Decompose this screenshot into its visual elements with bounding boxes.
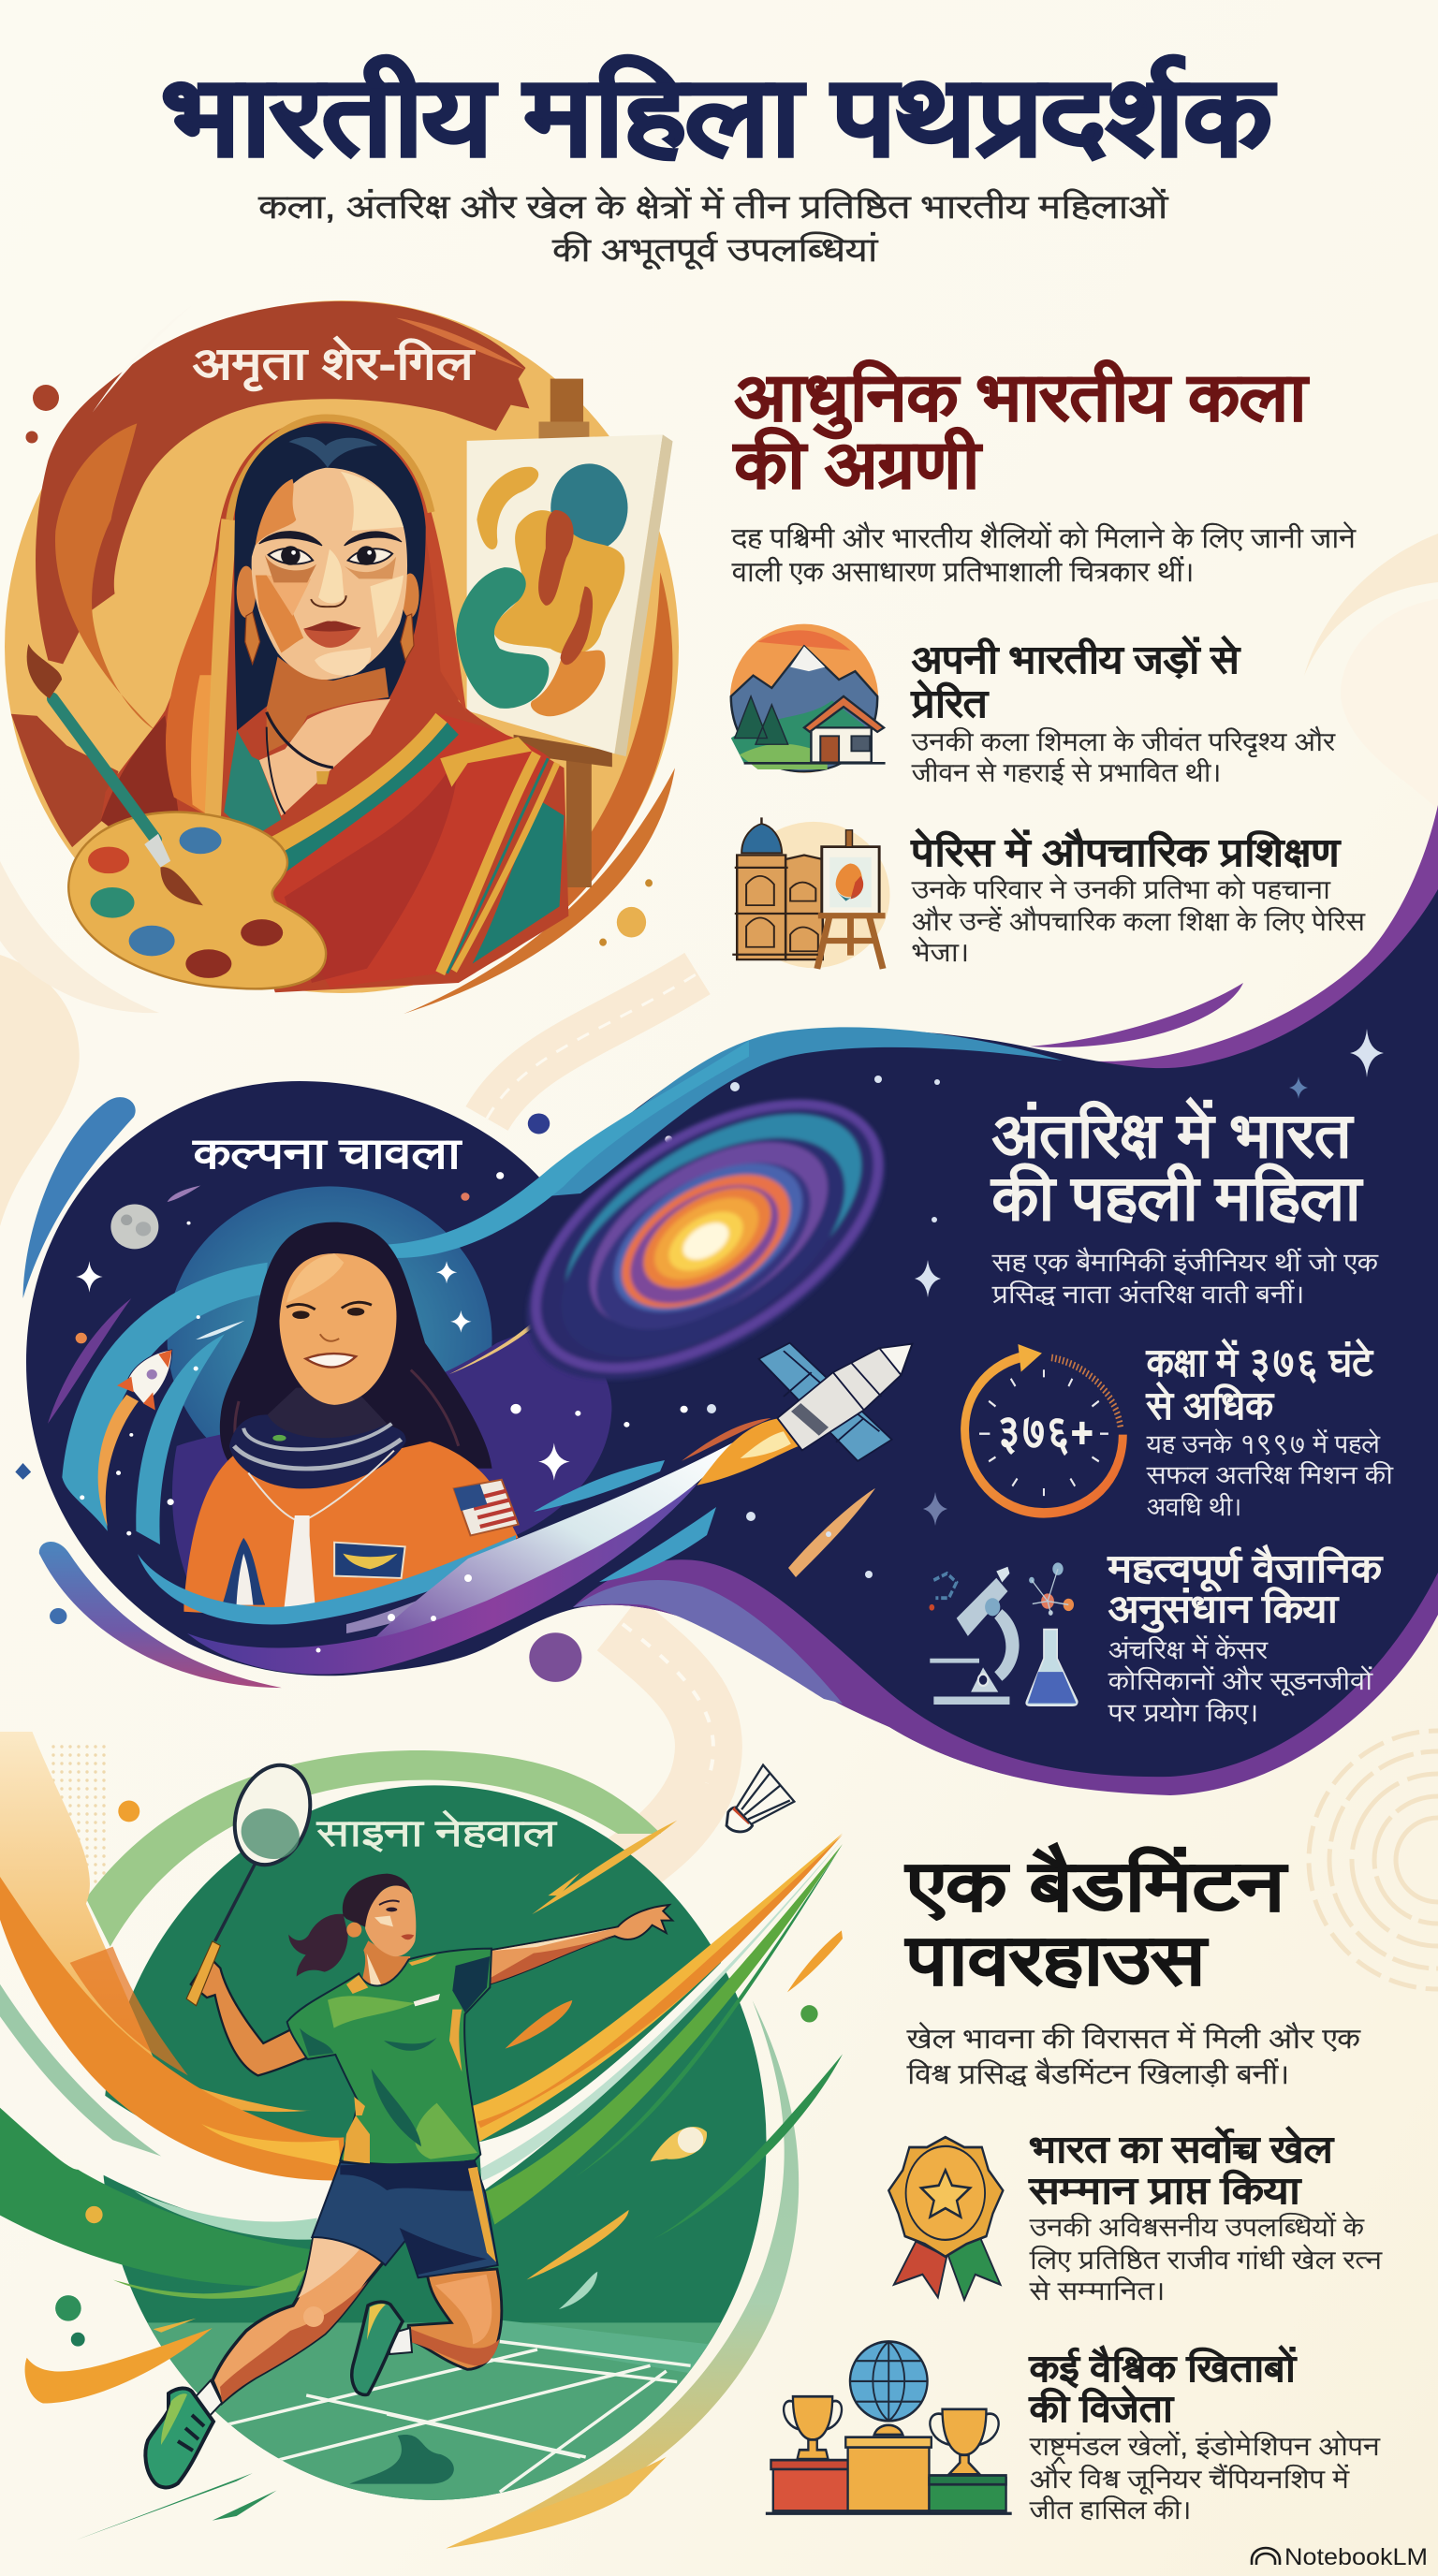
front sock and shoe xyxy=(145,2380,222,2487)
jersey xyxy=(287,1949,492,2165)
sub heading: research: अनुसंधान किया xyxy=(1108,1587,1340,1633)
small rocket xyxy=(98,1350,172,1527)
body: hours: सफल अतरिक्ष मिशन की xyxy=(1146,1460,1394,1489)
icon: medal xyxy=(888,2137,1003,2300)
stars and sparkles xyxy=(76,1082,739,1535)
saree base xyxy=(101,417,568,992)
scene: Kalpana Chawla portrait xyxy=(48,1041,749,1617)
body: roots: उनकी कला शिमला के जीवंत परिदृश्य और xyxy=(911,725,1336,757)
comet xyxy=(449,1275,577,1374)
green circle xyxy=(102,1785,767,2500)
front leg xyxy=(213,2237,389,2403)
intro paragraph: सह एक बैमामिकी इंजीनियर थीं जो एक xyxy=(991,1247,1379,1277)
purple top streak xyxy=(1030,983,1243,1047)
body: Paris: भेजा। xyxy=(912,936,969,967)
name: Saina Nehwal: साइना नेहवाल xyxy=(315,1809,559,1854)
sub heading: Paris: पेरिस में औपचारिक प्रशिक्षण xyxy=(910,828,1342,874)
galaxy xyxy=(479,1046,932,1437)
purple ribbon xyxy=(187,1484,697,1675)
motion accents xyxy=(25,1800,843,2548)
green swoosh left xyxy=(0,2108,317,2286)
intro paragraph: वाली एक असाधारण प्रतिभाशाली चित्रकार थीं। xyxy=(731,557,1194,587)
intro paragraph xyxy=(906,2023,1361,2089)
pale outer ring xyxy=(86,1750,661,1947)
body: roots xyxy=(911,725,1336,787)
body: titles: राष्ट्रमंडल खेलों, इंडोमेशिपन ओपन xyxy=(1029,2430,1381,2464)
purple top band xyxy=(1058,805,1438,1070)
long hair xyxy=(220,1222,492,1469)
sub heading: hours xyxy=(1145,1339,1374,1427)
heading: आधुनिक भारतीय कला xyxy=(735,360,1310,438)
head xyxy=(343,1874,416,1956)
subtitle: की अभूतपूर्व उपलब्धियां xyxy=(551,231,879,270)
purple nebula xyxy=(172,1332,611,1607)
flame xyxy=(697,1418,799,1486)
heading xyxy=(733,360,1310,502)
ponytail xyxy=(288,1914,348,1977)
intro paragraph: प्रसिद्ध नाता अंतरिक्ष वाती बनीं। xyxy=(991,1280,1304,1309)
panel: Saina Nehwal portrait xyxy=(0,1732,843,2548)
yellow fade swoosh left xyxy=(0,1732,312,2112)
sub heading: award: सम्मान प्राप्त किया xyxy=(1028,2169,1301,2212)
intro paragraph: विश्व प्रसिद्ध बैडमिंटन खिलाड़ी बनीं। xyxy=(906,2058,1289,2089)
scene background swooshes xyxy=(0,1732,799,2548)
badminton court xyxy=(148,2320,721,2500)
small blue swoosh by flag xyxy=(534,1460,665,1512)
right side orange arc xyxy=(459,572,672,978)
body: award xyxy=(1029,2211,1383,2305)
body: award: उनकी अविश्वसनीय उपलब्धियों के xyxy=(1029,2211,1365,2242)
sub heading: roots xyxy=(910,636,1240,725)
body: research: अंचरिक्ष में केंसर xyxy=(1108,1634,1269,1664)
racket and raised arm xyxy=(186,1755,322,2075)
panel: space wave xyxy=(15,805,1438,1795)
sub heading: titles: कई वैश्विक खिताबों xyxy=(1028,2345,1297,2390)
painter's palette xyxy=(68,812,326,988)
pale green streak left xyxy=(0,1984,161,2156)
name: Amrita Sher-Gil: अमृता शेर-गिल xyxy=(193,335,476,392)
brush swipe lower right xyxy=(404,768,675,1014)
panel: art text xyxy=(730,360,1366,969)
intro paragraph xyxy=(731,522,1357,587)
woman saree and palette xyxy=(27,644,653,988)
teal dagger xyxy=(599,1507,716,1582)
upper body xyxy=(287,1874,672,2277)
panel: space text xyxy=(929,1096,1394,1727)
decorative paint dots xyxy=(599,879,653,946)
sub heading: research: महत्वपूर्ण वैजानिक xyxy=(1107,1544,1384,1592)
side accents around space disc xyxy=(15,1097,581,1688)
body: hours xyxy=(1146,1428,1394,1521)
body: roots: जीवन से गहराई से प्रभावित थी। xyxy=(911,756,1221,787)
paint brush xyxy=(27,644,203,905)
icon: orbit timer xyxy=(965,1344,1123,1513)
upper blue swoosh xyxy=(387,1041,749,1258)
hair highlights xyxy=(235,1370,459,1446)
moon xyxy=(110,1205,158,1249)
heading xyxy=(903,1842,1289,1999)
intro paragraph: दह पश्चिमी और भारतीय शैलियों को मिलाने के लिए जानी जाने xyxy=(731,522,1357,553)
icon: shuttlecock xyxy=(726,1765,794,1832)
body: award: से सम्मानित। xyxy=(1029,2275,1165,2305)
terracotta brush ring xyxy=(11,301,529,847)
orange swoosh left xyxy=(0,1877,344,2180)
right side stars xyxy=(707,1029,1384,1578)
heading: अंतरिक्ष में भारत xyxy=(992,1096,1354,1170)
purple bottom band xyxy=(573,1559,1438,1795)
badminton player xyxy=(145,1755,672,2487)
body: research: पर प्रयोग किए। xyxy=(1108,1697,1258,1727)
body: titles: और विश्व जूनियर चैंपियनशिप में xyxy=(1030,2463,1350,2495)
intro paragraph xyxy=(991,1247,1379,1309)
shorts xyxy=(312,2160,498,2277)
body: Paris: उनके परिवार ने उनकी प्रतिभा को पहचाना xyxy=(911,873,1331,904)
lower blue and purple swooshes xyxy=(138,1442,735,1675)
body: hours: यह उनके १९९७ में पहले xyxy=(1146,1428,1381,1458)
heading: की पहली महिला xyxy=(990,1163,1363,1233)
extended arm xyxy=(489,1905,672,1984)
body: titles: जीत हासिल की। xyxy=(1029,2495,1191,2525)
white engine trail xyxy=(374,1442,735,1638)
rocket with solar panels xyxy=(682,1343,912,1486)
golden portrait disc xyxy=(5,300,679,993)
lilac inner band xyxy=(573,1580,843,1704)
icon: Paris building and easel xyxy=(732,817,890,969)
intro paragraph: खेल भावना की विरासत में मिली और एक xyxy=(906,2023,1361,2054)
sub heading: award: भारत का सर्वोच्च खेल xyxy=(1030,2126,1335,2171)
body: Paris xyxy=(911,873,1366,967)
sub heading: roots: अपनी भारतीय जड़ों से xyxy=(912,636,1240,681)
icon: mountains and house xyxy=(730,624,886,773)
face xyxy=(279,1253,396,1405)
suit details xyxy=(222,1451,519,1607)
lilac highlight in ribbon xyxy=(346,1498,637,1633)
sub heading: roots: प्रेरित xyxy=(910,680,989,725)
white band across left xyxy=(0,1984,344,2239)
body: research: कोसिकानों और सूडनजीवों xyxy=(1108,1665,1373,1696)
sub heading: titles xyxy=(1028,2345,1297,2430)
title: भारतीय महिला पथप्रदर्शक xyxy=(165,55,1276,177)
subtitle xyxy=(257,187,1169,270)
teal halo xyxy=(168,1186,492,1491)
suit collar ring xyxy=(229,1388,406,1488)
neck xyxy=(362,1940,410,1991)
icon: trophies on podium xyxy=(766,2342,1012,2513)
woman head and veil xyxy=(166,416,466,838)
icon: orbit timer: ३७६+ xyxy=(996,1409,1093,1456)
panel: badminton text xyxy=(766,1842,1383,2525)
jersey shading xyxy=(300,1954,490,2164)
blue top edge swoosh xyxy=(524,1027,1063,1198)
sub heading: hours: से अधिक xyxy=(1145,1382,1275,1427)
left blue swooshes xyxy=(62,1263,268,1531)
heading: की अग्रणी xyxy=(733,428,983,502)
right swooshes xyxy=(472,1833,843,2225)
heading: एक बैडमिंटन xyxy=(903,1842,1289,1925)
name: Kalpana Chawla: कल्पना चावला xyxy=(192,1132,462,1178)
icon: microscope and flask xyxy=(929,1562,1078,1705)
body: research xyxy=(1108,1634,1373,1727)
body: hours: अवधि थी। xyxy=(1147,1492,1241,1521)
body: Paris: और उन्हें औपचारिक कला शिक्षा के लिए पेरिस xyxy=(912,905,1366,936)
panel: Amrita Sher-Gil portrait xyxy=(5,300,679,1014)
navy wave shape xyxy=(26,889,1438,1793)
decorative dots xyxy=(55,1800,818,2347)
sub heading: titles: की विजेता xyxy=(1028,2385,1174,2430)
back leg and shoe xyxy=(408,2269,502,2369)
subtitle: कला, अंतरिक्ष और खेल के क्षेत्रों में तीन प्रतिष्ठित भारतीय महिलाओं xyxy=(257,187,1169,226)
background decorative washes xyxy=(0,534,1438,2181)
body: award: लिए प्रतिष्ठित राजीव गांधी खेल रत्न xyxy=(1029,2244,1383,2275)
astronaut suit xyxy=(183,1442,519,1617)
heading xyxy=(990,1096,1363,1233)
blue arc under suit xyxy=(138,1535,516,1625)
sub heading: hours: कक्षा में ३७६ घंटे xyxy=(1145,1339,1374,1384)
NotebookLM logo: NotebookLM xyxy=(1284,2544,1428,2570)
heading: पावरहाउस xyxy=(904,1925,1208,1999)
body: titles xyxy=(1029,2430,1381,2525)
sub heading: research xyxy=(1107,1544,1384,1633)
meteor xyxy=(788,1488,875,1577)
sub heading: award xyxy=(1028,2126,1335,2212)
easel and canvas xyxy=(456,379,673,887)
